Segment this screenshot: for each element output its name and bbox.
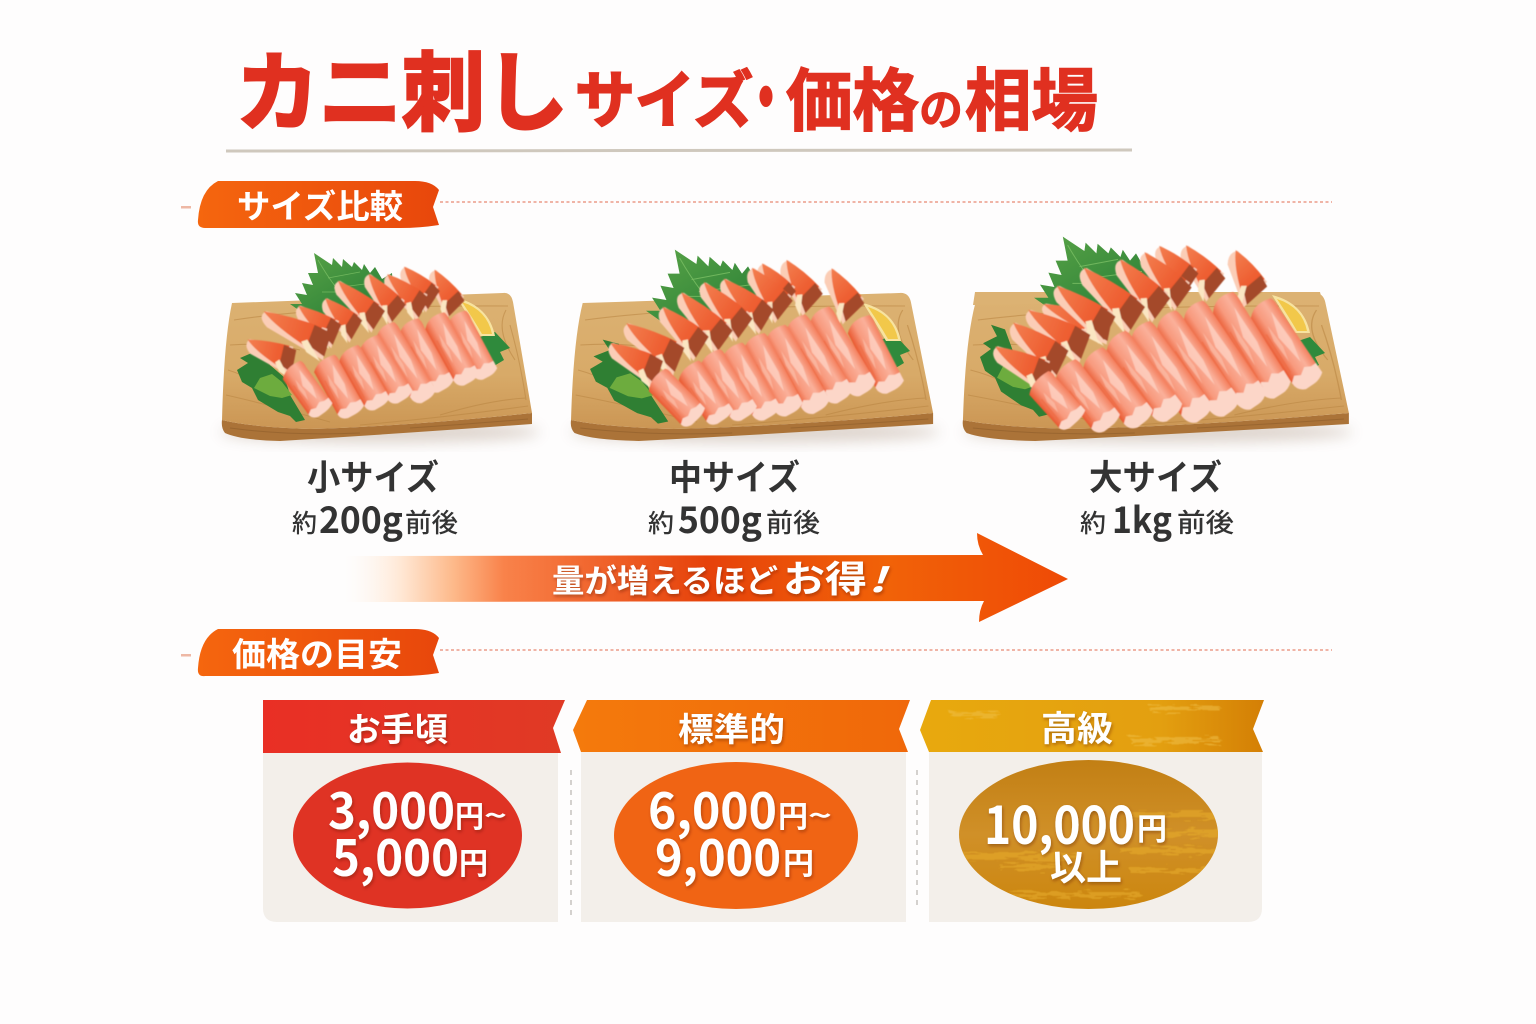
- panel: standard: 標準的: [678, 703, 785, 751]
- panel: premium: 円: [1137, 804, 1167, 849]
- large size label: 1kg: [1112, 492, 1172, 544]
- section heading: price guide: 価格の目安: [232, 628, 402, 676]
- divider: [570, 770, 572, 920]
- panel: affordable: お手頃: [347, 703, 448, 751]
- medium size label: 中サイズ: [669, 450, 800, 501]
- large crab plate: [963, 237, 1353, 443]
- large size label: 大サイズ: [1089, 450, 1222, 501]
- title underline: [226, 150, 1132, 151]
- title: サイズ: [575, 50, 753, 140]
- divider: [916, 770, 918, 910]
- medium size label: 約: [648, 504, 674, 540]
- panel: standard: [573, 700, 910, 922]
- title: カニ刺し: [236, 23, 568, 148]
- panel: affordable: [263, 700, 565, 922]
- panel: premium: 高級: [1041, 701, 1113, 752]
- panel: standard: 6,000: [648, 772, 777, 844]
- small crab plate: [220, 253, 540, 443]
- large size label: 前後: [1177, 503, 1234, 540]
- title: 相場: [965, 46, 1098, 145]
- panel: premium: [920, 700, 1264, 922]
- small size label: 200g: [319, 492, 403, 544]
- panel: premium: 以上: [1050, 839, 1122, 891]
- panel: affordable: 円: [455, 792, 484, 836]
- panel: standard: 円: [783, 839, 814, 883]
- arrow: more quantity, better value: !: [868, 553, 891, 602]
- title: の: [919, 74, 963, 138]
- panel: affordable: ~: [484, 796, 507, 833]
- arrow: more quantity, better value: 量が増えるほど: [552, 556, 778, 602]
- medium size label: 500g: [678, 492, 762, 544]
- arrow: more quantity, better value: [345, 533, 1068, 622]
- title: [236, 23, 1098, 148]
- title: 価格: [786, 46, 919, 145]
- panel: standard: 9,000: [655, 819, 781, 891]
- title: ・: [744, 40, 788, 145]
- panel: standard: ~: [808, 796, 832, 833]
- panel: affordable: 5,000: [332, 819, 459, 891]
- medium crab plate: [570, 250, 940, 443]
- small size label: 小サイズ: [307, 450, 439, 501]
- small size label: [292, 450, 458, 544]
- medium size label: 前後: [766, 503, 820, 540]
- small size label: 前後: [405, 503, 458, 540]
- small size label: 約: [292, 504, 317, 540]
- panel: standard: 円: [778, 792, 808, 836]
- large size label: [1080, 450, 1234, 544]
- section heading: size comparison: [181, 180, 1332, 228]
- arrow: more quantity, better value: お得: [783, 549, 867, 603]
- panel: affordable: 円: [459, 839, 488, 883]
- large size label: 約: [1080, 504, 1106, 540]
- panel: affordable: 3,000: [328, 772, 455, 844]
- medium size label: [648, 450, 820, 544]
- section heading: price guide: [181, 628, 1332, 676]
- panel: premium: 10,000: [984, 784, 1135, 859]
- section heading: size comparison: サイズ比較: [237, 180, 403, 228]
